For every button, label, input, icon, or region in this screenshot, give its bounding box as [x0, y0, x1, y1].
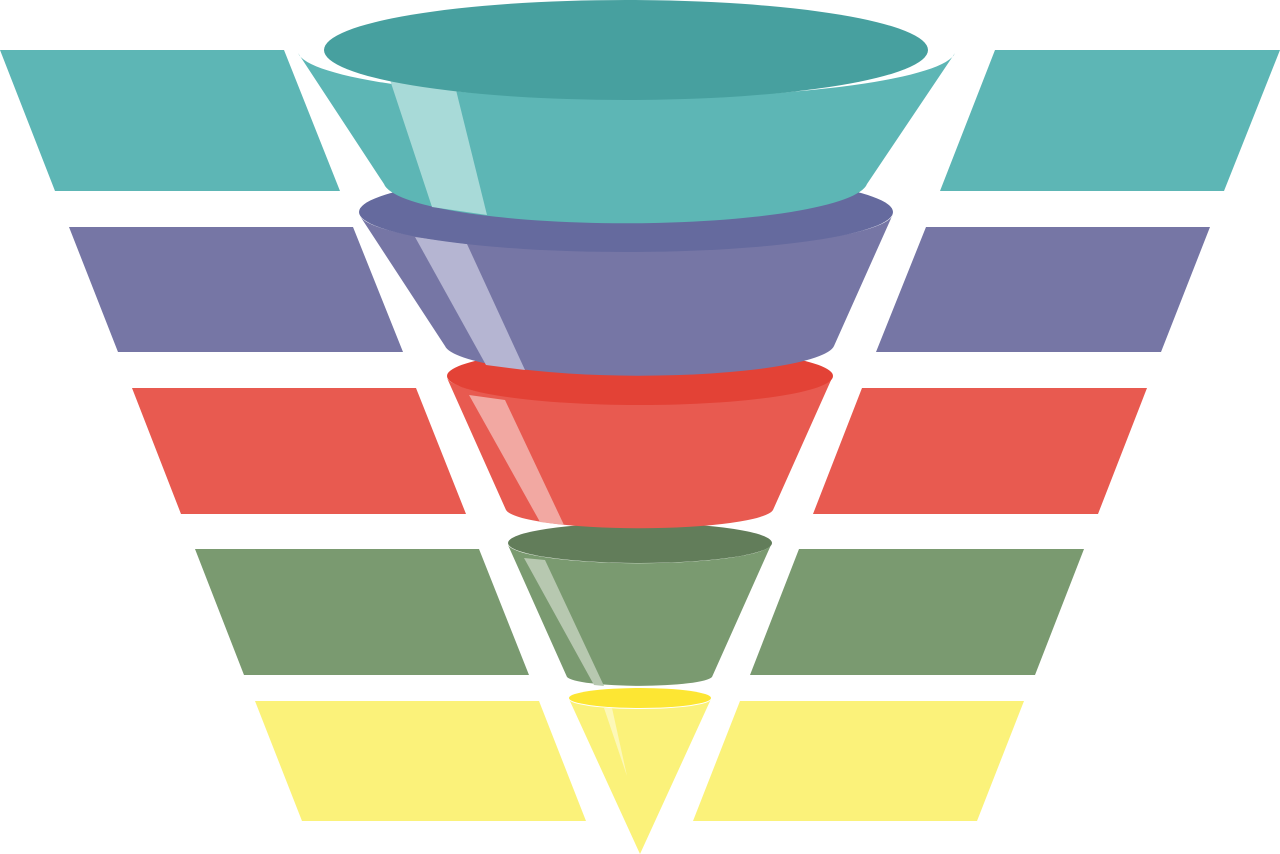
funnel segment 1 (teal) — [298, 0, 955, 223]
band: left 2 — [69, 227, 403, 352]
band: right 3 — [813, 388, 1147, 514]
band: left 3 — [132, 388, 466, 514]
band: left 1 — [0, 50, 340, 191]
funnel segment 4 (green) — [508, 523, 772, 686]
left bands — [0, 50, 586, 821]
band: right 5 — [693, 701, 1024, 821]
band: right 2 — [876, 227, 1210, 352]
band: right 1 — [940, 50, 1280, 191]
band: left 5 — [255, 701, 586, 821]
funnel segment 3 (red) — [447, 347, 833, 528]
band: right 4 — [750, 549, 1084, 675]
funnel segment 2 (purple) — [359, 172, 893, 376]
right bands — [693, 50, 1280, 821]
band: left 4 — [195, 549, 529, 675]
funnel segment 5 (yellow tip) — [569, 688, 711, 854]
